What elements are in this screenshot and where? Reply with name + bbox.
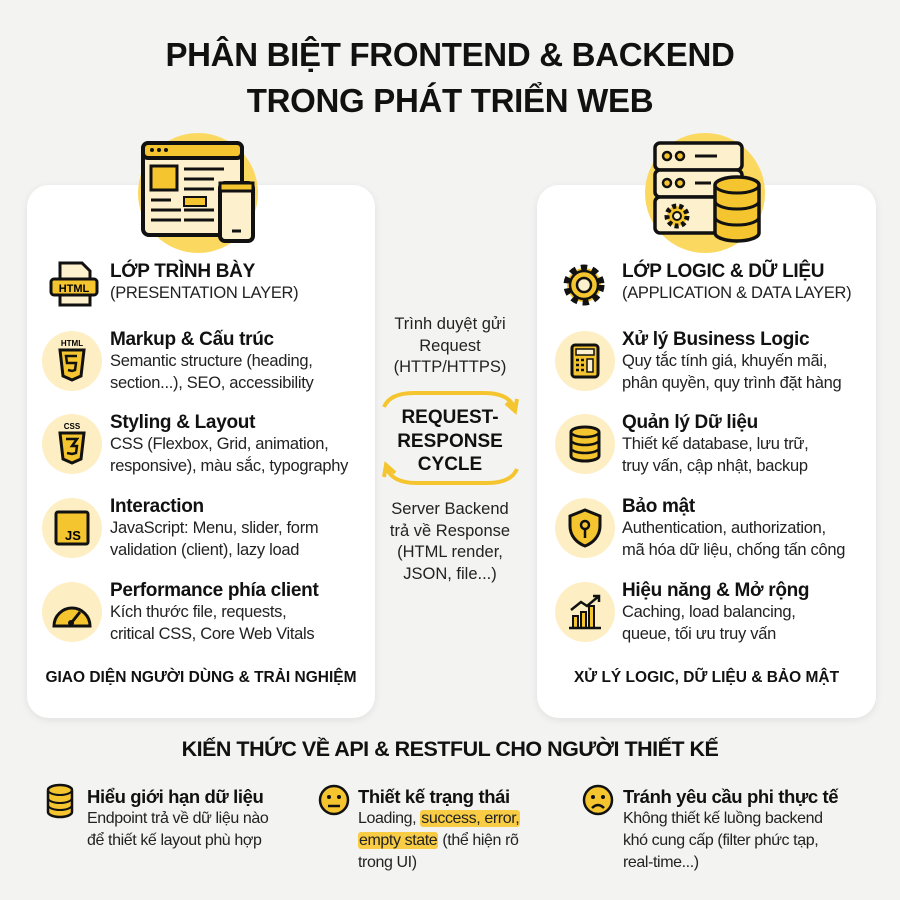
text: cycle label: REQUEST- (401, 407, 499, 428)
icon: calculator (555, 331, 615, 391)
item: business logic: Xử lý Business Logic (622, 329, 809, 350)
item: interaction: validation (client), lazy load (110, 540, 299, 558)
item: unrealistic: Tránh yêu cầu phi thực tế (623, 786, 838, 807)
icon: sad face (582, 784, 614, 816)
icon: shield (555, 498, 615, 558)
text: cycle label: RESPONSE (397, 430, 503, 452)
icon: gear (564, 264, 604, 306)
icon: gauge (42, 582, 102, 642)
text: request: Trình duyệt gửi (394, 315, 506, 333)
text: response: JSON, file...) (403, 564, 497, 582)
item: data limits: để thiết kế layout phù hợp (87, 832, 261, 849)
heading: api: KIẾN THỨC VỀ API & RESTFUL CHO NGƯỜI THIẾT KẾ (182, 737, 718, 761)
item: performance scale: queue, tối ưu truy vấn (622, 624, 776, 642)
item: performance (110, 580, 319, 642)
item: states: Thiết kế trạng thái (358, 786, 510, 807)
item: security: Authentication, authorization, (622, 519, 826, 537)
title (165, 36, 735, 119)
icon: js: JS (65, 528, 81, 543)
title: PHÂN BIỆT FRONTEND & BACKEND (165, 36, 735, 73)
item: presentation layer: (PRESENTATION LAYER) (110, 284, 298, 302)
icon: database (555, 414, 615, 474)
item: styling (110, 412, 348, 474)
footer: backend: XỬ LÝ LOGIC, DỮ LIỆU & BẢO MẬT (574, 669, 839, 686)
text: response: (HTML render, (397, 543, 503, 561)
item: data limits (87, 786, 268, 849)
item: performance scale (622, 580, 809, 642)
icon: html file: HTML (59, 283, 90, 295)
icon: css3: CSS (64, 422, 81, 431)
text: response: trả về Response (390, 522, 510, 540)
item: unrealistic: khó cung cấp (filter phức tạp, (623, 832, 818, 849)
icon: db small (46, 784, 74, 818)
item: unrealistic (623, 786, 838, 871)
arrow: cycle (382, 391, 519, 485)
item: data limits: Hiểu giới hạn dữ liệu (87, 786, 263, 807)
text: request (394, 315, 506, 376)
item: performance: critical CSS, Core Web Vitals (110, 624, 314, 642)
icon: browser and phone (138, 133, 258, 253)
item: data management: Thiết kế database, lưu trữ, (622, 435, 808, 453)
icon: html5: HTML (61, 339, 83, 348)
item: unrealistic: real-time...) (623, 854, 699, 871)
item: styling: responsive), màu sắc, typography (110, 456, 348, 474)
footer: frontend: GIAO DIỆN NGƯỜI DÙNG & TRẢI NGHIỆM (45, 669, 357, 686)
item: logic layer: (APPLICATION & DATA LAYER) (622, 284, 851, 302)
icon: html5 (42, 331, 102, 391)
text: request: Request (419, 336, 481, 354)
text: request: (HTTP/HTTPS) (394, 358, 506, 376)
item: states: empty state (thể hiện rõ (359, 832, 518, 849)
text: cycle label (397, 407, 503, 475)
item: security (622, 496, 845, 558)
item: security: Bảo mật (622, 496, 695, 517)
icon: neutral face (318, 784, 350, 816)
item: logic layer: LỚP LOGIC & DỮ LIỆU (622, 261, 824, 282)
icon: chart (555, 582, 615, 642)
icon: js (42, 498, 102, 558)
item: markup (110, 329, 314, 392)
text: cycle label: CYCLE (418, 454, 482, 475)
item: security: mã hóa dữ liệu, chống tấn công (622, 540, 845, 558)
item: states: trong UI) (358, 854, 417, 871)
item: markup: section...), SEO, accessibility (110, 374, 313, 392)
item: markup: Markup & Cấu trúc (110, 329, 274, 350)
item: data management: Quản lý Dữ liệu (622, 412, 758, 433)
item: data limits: Endpoint trả về dữ liệu nào (87, 810, 268, 827)
item: markup: Semantic structure (heading, (110, 352, 313, 370)
text: response (390, 500, 510, 582)
item: interaction: JavaScript: Menu, slider, form (110, 519, 318, 537)
item: styling: Styling & Layout (110, 412, 255, 433)
item: business logic: Quy tắc tính giá, khuyến mãi, (622, 352, 827, 370)
item: states: Loading, success, error, (358, 810, 519, 827)
item: logic layer (622, 260, 851, 302)
icon: html file (50, 262, 98, 306)
item: data management: truy vấn, cập nhật, backup (622, 456, 808, 474)
item: presentation layer: LỚP TRÌNH BÀY (110, 261, 255, 282)
item: unrealistic: Không thiết kế luồng backend (623, 810, 823, 827)
item: performance: Performance phía client (110, 580, 319, 601)
item: interaction: Interaction (110, 496, 204, 517)
text: response: Server Backend (391, 500, 509, 518)
item: styling: CSS (Flexbox, Grid, animation, (110, 435, 328, 453)
item: states (358, 786, 520, 871)
panel: frontend (27, 185, 375, 718)
icon: server and database (645, 133, 765, 253)
item: performance scale: Caching, load balancing, (622, 603, 796, 621)
item: business logic: phân quyền, quy trình đặt hàng (622, 374, 841, 392)
item: performance: Kích thước file, requests, (110, 603, 286, 621)
item: interaction (110, 496, 318, 558)
panel: backend (537, 185, 876, 718)
item: business logic (622, 329, 841, 392)
item: performance scale: Hiệu năng & Mở rộng (622, 580, 809, 601)
item: presentation layer (110, 260, 298, 302)
title: TRONG PHÁT TRIỂN WEB (247, 82, 653, 119)
icon: css3 (42, 414, 102, 474)
item: data management (622, 412, 808, 474)
